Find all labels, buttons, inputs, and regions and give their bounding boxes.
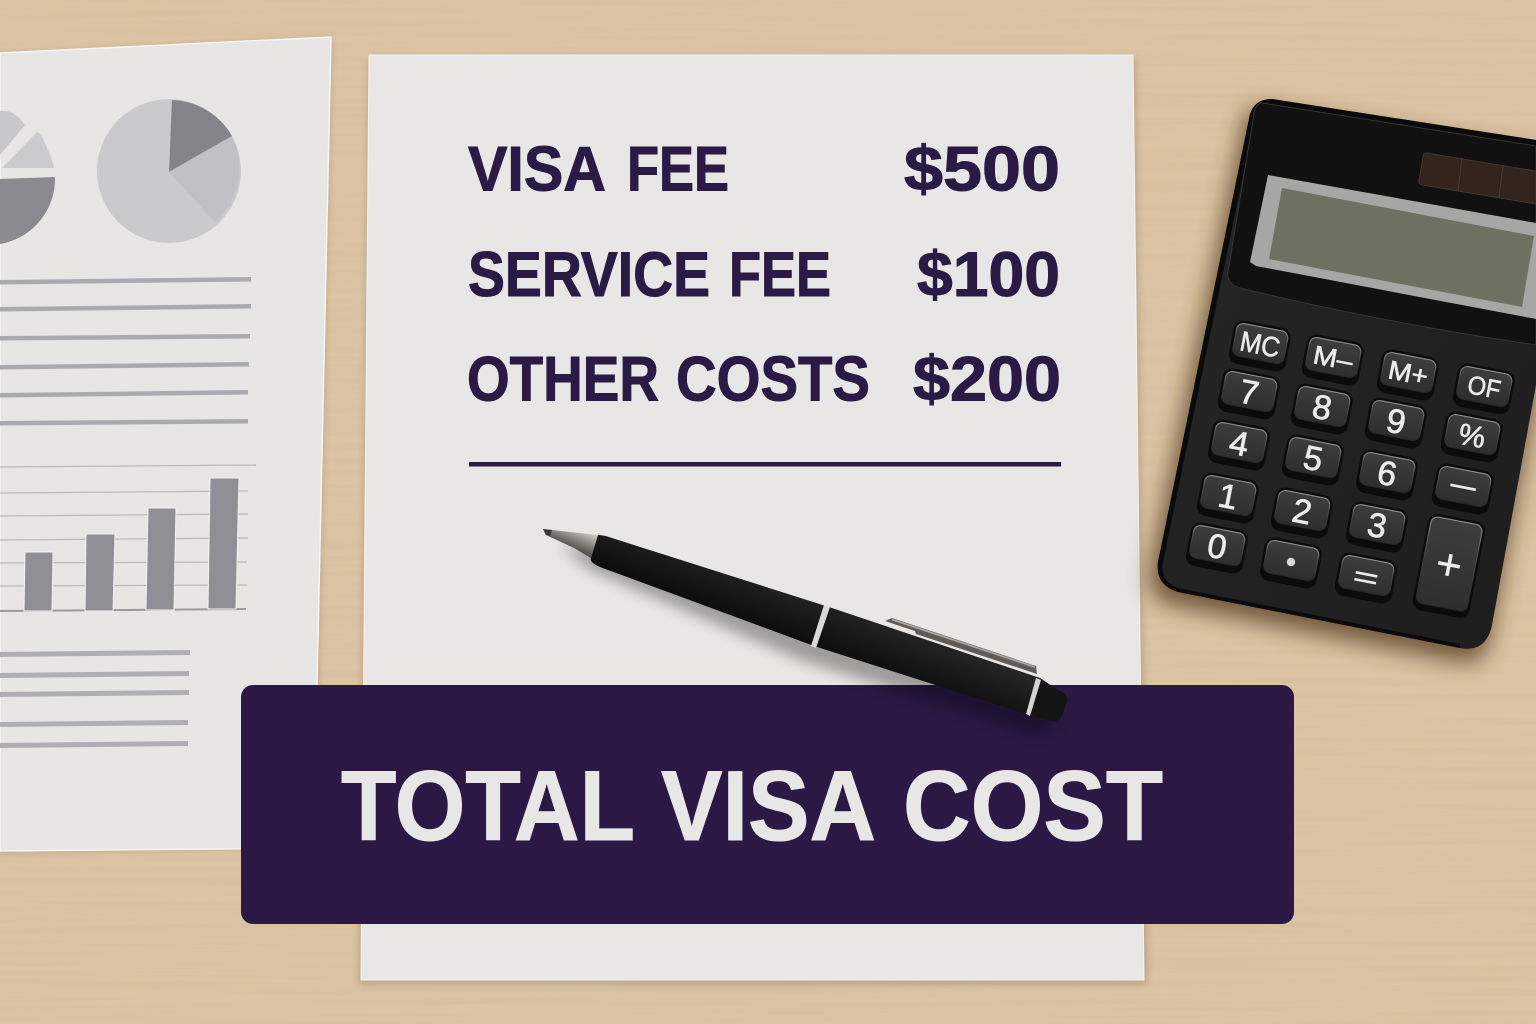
key: M-: M– [1311,339,1356,377]
row: service fee: $100 [917,240,1060,310]
row: visa fee: $500 [904,134,1060,204]
key: 0: 0 [1204,527,1230,567]
key: 1: 1 [1215,477,1241,517]
key: 7: 7 [1236,373,1262,413]
pie chart: left cropped [0,111,55,244]
row: service fee: SERVICE [468,240,710,310]
banner: total visa cost: TOTAL [341,750,635,861]
key: 2: 2 [1289,492,1315,532]
bar chart [0,465,256,611]
text lines: upper [0,277,251,426]
key: minus [1430,462,1495,516]
banner: total visa cost: COST [903,750,1163,861]
panel: left report sheet [0,37,331,853]
lcd screen [1269,188,1534,307]
key: 3: 3 [1364,506,1390,546]
panel: main cost sheet [359,55,1147,984]
key: M+ [1375,348,1440,402]
row: other costs: $200 [913,344,1061,414]
key: 8: 8 [1309,388,1335,428]
row: service fee [468,240,1060,310]
key: 1 [1195,471,1260,525]
key: MC [1227,319,1292,373]
key: percent [1439,410,1504,464]
key: M- [1300,333,1365,387]
key: 6 [1354,448,1419,502]
key: equals [1333,551,1398,605]
key: 9 [1363,396,1428,450]
key: 4: 4 [1226,424,1252,464]
banner: total visa cost [241,685,1294,924]
key: OF: OF [1465,369,1503,405]
row: other costs: OTHER [467,344,659,414]
text lines: lower [0,650,190,748]
key: MC: MC [1238,325,1283,364]
key: M+: M+ [1386,354,1431,392]
key: 5: 5 [1300,439,1326,479]
key: plus [1411,512,1487,620]
row: visa fee: VISA [468,134,606,204]
icon: pen [543,529,1067,735]
icon: calculator [1149,99,1536,663]
pie chart: right [97,99,241,243]
key: 0 [1184,521,1249,575]
row: visa fee: FEE [627,134,729,204]
solar cell [1419,153,1536,204]
calculator top display panel [1228,103,1536,345]
key: 8 [1289,382,1354,436]
key: 4 [1206,418,1271,472]
key: OF [1451,362,1516,416]
key: 5 [1280,433,1345,487]
calculator keys [1184,319,1516,620]
key: 3 [1344,500,1409,554]
banner: total visa cost: VISA [661,750,876,861]
key: decimal point [1258,536,1323,590]
key: percent: % [1456,418,1488,455]
key: 9: 9 [1383,402,1409,442]
lcd bezel [1250,175,1536,319]
key: 6: 6 [1374,454,1400,494]
key: 7 [1216,367,1281,421]
total rule [469,462,1061,466]
row: other costs: COSTS [676,344,870,414]
row: other costs [467,344,1061,414]
row: service fee: FEE [729,240,831,310]
row: visa fee [468,134,1060,204]
key: 2 [1269,486,1334,540]
